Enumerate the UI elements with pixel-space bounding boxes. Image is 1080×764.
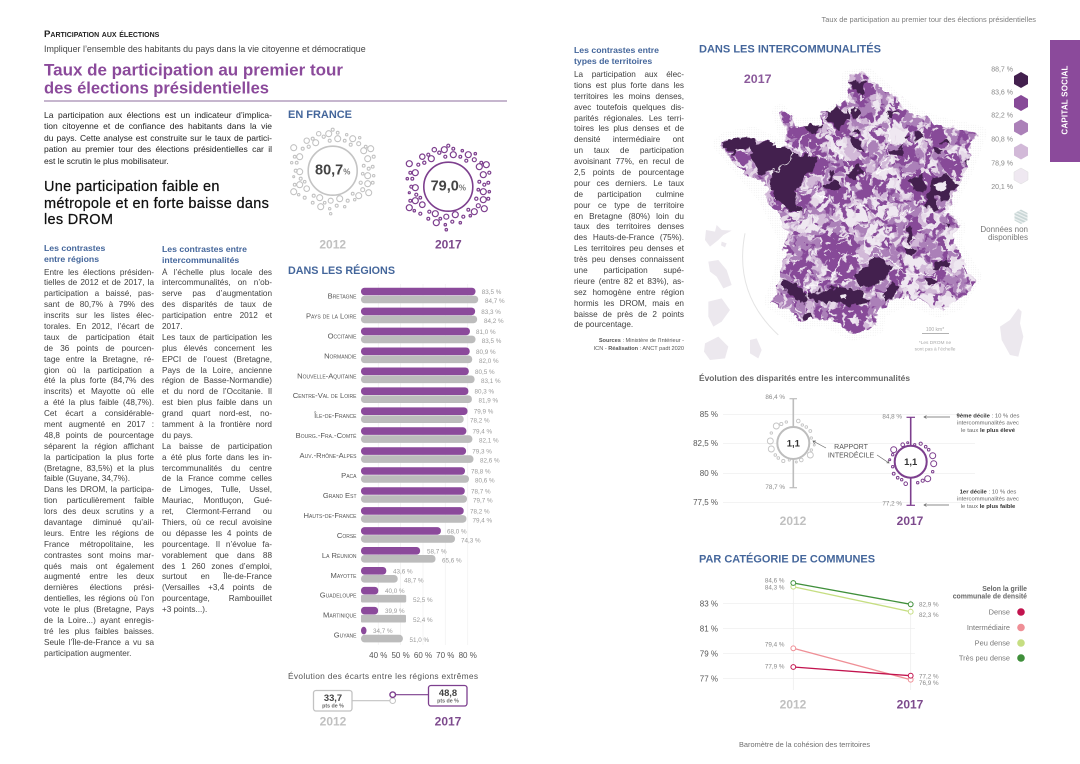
text column: regions: de la Loire...) ayant enregis- xyxy=(44,616,154,625)
text column: territory types: territoires les moins denses, xyxy=(574,92,684,101)
map legend: 83,6 % xyxy=(991,90,1013,96)
running header: Taux de participation au premier tour des élections présidentielles xyxy=(822,15,1036,24)
bar values: 81,0 % xyxy=(476,329,496,336)
text column: intercommunalities: (Versailles +3,4 points de xyxy=(162,583,272,592)
bar axis: 80 % xyxy=(459,651,477,660)
text column: regions: participation a baissé, pas- xyxy=(44,289,154,298)
bar values: 81,9 % xyxy=(478,398,499,405)
text column: regions: tré les plus faibles baisses. xyxy=(44,627,154,636)
subheading: intercommunalities xyxy=(162,244,247,264)
text column: intercommunalities: vorablement que dans 88 xyxy=(162,551,272,560)
text column: intercommunalities: +3 points...). xyxy=(162,605,207,614)
text column: intercommunalities: intercommunalités, on n’ob- xyxy=(162,278,272,287)
text column: territory types: sez homogène entre région xyxy=(574,288,684,297)
text column: territory types: 2,5 points de pourcentage xyxy=(574,168,684,177)
text column: regions: été la plus forte (84,7% des xyxy=(44,376,154,385)
year labels: gap chart xyxy=(320,714,462,728)
subheading: regions: Les contrastes xyxy=(44,243,105,253)
map legend: 20,1 % xyxy=(991,184,1013,191)
subheading: intercommunalities: Les contrastes entre xyxy=(162,244,247,254)
disparities chart: 85 % xyxy=(700,410,718,419)
region labels: Guyane xyxy=(334,631,357,640)
bar values: 79,7 % xyxy=(473,498,493,504)
line chart: communes: 84,3 % xyxy=(765,584,785,592)
region labels: Grand Est xyxy=(323,491,356,500)
region labels: Nouvelle-Aquitaine xyxy=(297,371,357,380)
rosette: 2012: 80,7% xyxy=(315,162,350,178)
decile notes: 1er décile : 10 % des xyxy=(960,490,1016,496)
ratio label: INTERDÉCILE xyxy=(828,450,874,460)
year labels: disparities xyxy=(780,514,924,528)
text column: regions: participation augmenter. xyxy=(44,649,131,658)
sources: ICN - Réalisation : ANCT padt 2020 xyxy=(594,346,684,352)
line chart: communes: 76,9 % xyxy=(919,680,939,687)
text column: territory types: une participation supé- xyxy=(574,266,684,275)
text column: intercommunalities: est bien plus faible dans un xyxy=(162,398,272,407)
text column: regions: vote le plus (Bretagne, Pays xyxy=(44,605,154,614)
region labels: Hauts-de-France xyxy=(304,511,357,520)
dotted halo xyxy=(721,76,979,333)
text column: regions: Entre les élections présiden- xyxy=(44,268,154,276)
text column: regions: gion où la participation a xyxy=(44,366,154,375)
bar axis: 70 % xyxy=(436,651,454,660)
bar axis xyxy=(369,651,477,660)
side tab: capital social: CAPITAL SOCIAL xyxy=(1060,65,1070,135)
text column: territory types: Les territoires peu denses et xyxy=(574,244,684,253)
text column: regions: a été la plus faible (48,7%). xyxy=(44,398,154,407)
map legend: Données non xyxy=(980,225,1028,234)
region labels: Occitanie xyxy=(328,331,357,340)
text column: territory types: des Hauts-de-France (75%). xyxy=(574,233,684,242)
text column: intercommunalities: surtout en Île-de-France xyxy=(162,572,272,581)
year labels: communes: 2017 xyxy=(897,698,924,712)
text column: territory types xyxy=(574,70,684,329)
year labels: communes: 2012 xyxy=(780,698,807,712)
map legend: 88,7 % xyxy=(991,66,1013,74)
region labels: Île-de-France xyxy=(313,411,357,420)
bar values: 82,0 % xyxy=(479,358,499,365)
bar values: 78,8 % xyxy=(471,468,491,476)
region labels: Corse xyxy=(337,531,357,540)
region labels: Normandie xyxy=(324,351,357,360)
text column: territory types: très peu denses connaissent xyxy=(574,255,684,264)
disparities chart: 77,5 % xyxy=(693,498,718,507)
map legend: 82,2 % xyxy=(991,112,1013,120)
text column: territory types: taux des territoires denses xyxy=(574,222,684,231)
heading: intercommunalités: DANS LES INTERCOMMUNALITÉS xyxy=(699,42,881,56)
gap chart: 48,8 xyxy=(439,687,457,698)
text column: regions: Cet écart a considérable- xyxy=(44,409,154,418)
line chart: communes: 79 % xyxy=(700,650,718,658)
text column: regions: tion particulièrement faible xyxy=(44,496,154,505)
bar values: 78,7 % xyxy=(471,488,491,496)
text column: regions: qués mais ont également xyxy=(44,562,154,571)
bar values: 74,3 % xyxy=(461,537,481,544)
region labels: Martinique xyxy=(323,611,357,620)
map scale note xyxy=(915,327,956,352)
text column: territory types: parités régionales. Les terri- xyxy=(574,114,684,123)
text column: intercommunalities: et du nord de l’Occitanie. Il xyxy=(162,387,272,396)
text column: regions: tage entre la Bretagne, ré- xyxy=(44,355,154,364)
bar values: 65,6 % xyxy=(442,557,462,564)
bar values: 82,1 % xyxy=(479,438,499,445)
subtitle: Impliquer l’ensemble des habitants du pays dans la vie citoyenne et démocratique xyxy=(44,44,366,54)
bar values: 34,7 % xyxy=(373,628,393,635)
bar values: 78,2 % xyxy=(470,508,490,515)
whisker 2017 xyxy=(882,414,937,508)
rosette: 2017: 79,0% xyxy=(431,178,466,194)
region labels: Pays de la Loire xyxy=(306,311,357,320)
whisker 2012 xyxy=(765,394,815,491)
decile notes: le taux le plus élevé xyxy=(961,428,1016,434)
overseas and Corsica silhouettes xyxy=(704,225,1023,360)
bar values xyxy=(373,289,505,644)
year labels: gap chart: 2012 xyxy=(320,714,347,728)
text column: regions: leurs. Entre les régions de xyxy=(44,529,154,538)
whisker 2012: 1,1 xyxy=(787,438,801,450)
text column: regions: France métropolitaine, les xyxy=(44,540,154,549)
arrows xyxy=(813,416,950,506)
bar axis: 50 % xyxy=(391,651,410,660)
bar values: 80,9 % xyxy=(476,349,496,356)
subheading: territory types xyxy=(574,45,659,66)
text column: regions: dentielles, les régions où l’on xyxy=(44,594,154,603)
text column: regions: davantage diminué qu’ail- xyxy=(44,518,154,527)
map legend: disponibles xyxy=(988,233,1028,242)
communes legend: Dense xyxy=(989,608,1010,616)
intro paragraph: est le scrutin le plus mobilisateur. xyxy=(44,156,169,166)
text column: regions: 48,8 points de pourcentage xyxy=(44,431,154,440)
year labels: en France: 2012 xyxy=(319,238,346,252)
text column: intercommunalities: La baisse de participation xyxy=(162,442,272,451)
intro paragraph: du pays. Cette analyse est construite sur le taux de partici- xyxy=(44,133,272,143)
bar values: 80,3 % xyxy=(474,389,495,396)
text column: intercommunalities xyxy=(162,268,272,614)
line chart: communes: 82,9 % xyxy=(919,602,939,608)
intro paragraph: La participation aux élections est un indicateur d’implica- xyxy=(44,110,272,120)
communes legend: Selon la grille xyxy=(982,586,1027,593)
ratio label: RAPPORT xyxy=(834,444,869,451)
gap chart xyxy=(314,686,467,711)
region labels: Bourg.-Fra.-Comté xyxy=(296,431,357,440)
bar chart: regions xyxy=(293,284,505,660)
bar values: 79,4 % xyxy=(472,517,493,524)
region labels: Auv.-Rhône-Alpes xyxy=(300,451,357,460)
year labels: en France xyxy=(319,238,462,252)
map scale note: sont pas à l’échelle xyxy=(915,346,956,352)
text column: territory types: pour ces derniers. Le taux xyxy=(574,179,684,188)
line chart: communes xyxy=(700,578,939,690)
text column: intercommunalities: tercommunalités du centre xyxy=(162,464,272,473)
region labels: Paca xyxy=(341,471,357,480)
heading: communes: PAR CATÉGORIE DE COMMUNES xyxy=(699,552,875,566)
map legend xyxy=(980,66,1028,242)
region labels xyxy=(293,292,357,640)
gap chart: 33,7 xyxy=(324,692,342,703)
text column: intercommunalities: grand quart nord-est, no- xyxy=(162,409,272,418)
region labels: Mayotte xyxy=(331,571,357,580)
side tab: capital social xyxy=(1050,40,1080,162)
year labels: communes xyxy=(780,698,924,712)
text column: territory types: de pourcentage. xyxy=(574,320,633,329)
whisker 2012: 78,7 % xyxy=(765,484,785,491)
subheading: intercommunalities: intercommunalités xyxy=(162,254,239,264)
main title xyxy=(44,62,344,98)
text column: intercommunalities: ret, Clermont-Ferrand ou xyxy=(162,507,272,516)
bar values: 79,3 % xyxy=(472,449,492,456)
bar values: 78,2 % xyxy=(470,418,490,425)
text column: regions: (Bretagne, 83,5%) et la plus xyxy=(44,464,154,473)
text column: regions: ment augmenté en 2017 : xyxy=(44,420,154,429)
section heading: métropole et en forte baisse dans xyxy=(44,196,269,212)
text column: intercommunalities: a été plus forte dans les in- xyxy=(162,453,272,462)
disparities chart xyxy=(693,394,1019,510)
text column: regions: tielles de 2012 et de 2017, la xyxy=(44,278,154,287)
bar values: 83,3 % xyxy=(481,309,501,316)
line chart: communes: 84,6 % xyxy=(765,578,785,584)
bar values: 83,5 % xyxy=(482,289,502,296)
bar values: 52,4 % xyxy=(413,617,433,624)
text column: territory types: en Bretagne (80%) loin du xyxy=(574,212,684,221)
text column: regions: Seule l’Île-de-France a vu sa xyxy=(44,638,154,647)
year labels: en France: 2017 xyxy=(435,238,462,252)
communes legend: Peu dense xyxy=(975,638,1010,648)
text column: regions: contrastes sont moins mar- xyxy=(44,551,154,560)
communes legend: communale de densité xyxy=(953,594,1027,600)
text column: intercommunalities: pourcentage. Il n’évolue fa- xyxy=(162,540,272,549)
text column: territory types: tions est plus forte dans les xyxy=(574,81,684,90)
disparities chart: 80 % xyxy=(700,469,718,478)
text column: intercommunalities: 2017. xyxy=(162,322,182,331)
text column: regions: inscrits sur les listes élec- xyxy=(44,311,154,320)
line chart: communes: 79,4 % xyxy=(765,642,785,648)
text column: intercommunalities: Les taux de participation les xyxy=(162,333,272,342)
text column: intercommunalities: tamment à la frontière nord xyxy=(162,420,272,429)
text column: intercommunalities: serve pas d’augmentation xyxy=(162,289,272,298)
intro paragraph: tion citoyenne et de confiance des habitants dans la vie xyxy=(44,121,272,131)
communes legend xyxy=(953,586,1027,662)
gap chart: pts de % xyxy=(437,698,459,704)
bar values: 79,9 % xyxy=(474,409,494,416)
bar values: 79,4 % xyxy=(472,429,493,436)
text column: intercommunalities: plus élevés concernent les xyxy=(162,344,272,353)
caption: extreme regions gap: Évolution des écarts entre les régions extrêmes xyxy=(288,671,478,681)
map scale note: *Les DROM ne xyxy=(919,340,951,346)
text column: intercommunalities: ou dépasse les 4 points de xyxy=(162,529,272,538)
map scale note: 100 km* xyxy=(926,327,944,333)
text column: regions: la participation la plus forte xyxy=(44,453,154,462)
line chart: communes: 77 % xyxy=(700,674,718,684)
bar values: 82,6 % xyxy=(480,458,500,465)
text column: intercommunalities: de la France comme celles xyxy=(162,474,272,483)
text column: territory types: avoisinant 77%, en recul de xyxy=(574,157,684,166)
whisker 2017: 77,2 % xyxy=(882,500,902,508)
communes legend: Intermédiaire xyxy=(967,623,1010,632)
text column: regions xyxy=(44,268,154,658)
section heading: Une participation faible en xyxy=(44,179,220,195)
bar values: 80,6 % xyxy=(475,478,495,484)
text column: intercommunalities: de Limoges, Tulle, Ussel, xyxy=(162,485,272,494)
text column: territory types: hormis les DROM, mais en xyxy=(574,299,684,308)
subheading: regions: entre régions xyxy=(44,254,99,264)
region labels: Centre-Val de Loire xyxy=(293,391,357,400)
map legend: 80,8 % xyxy=(991,136,1013,144)
main title: Taux de participation au premier tour xyxy=(44,62,344,80)
caption: disparities: Évolution des disparités entre les intercommunalités xyxy=(699,372,910,383)
text column: territory types: rieure (entre 82 et 83%), as- xyxy=(574,277,684,286)
rosette: 2012 xyxy=(290,128,375,215)
heading: en France: EN FRANCE xyxy=(288,109,352,121)
text column: intercommunalities: des disparités de taux de xyxy=(162,300,272,309)
bar values: 84,7 % xyxy=(485,298,505,305)
region labels: La Réunion xyxy=(322,551,357,560)
text column: regions: lors des deux scrutins y a xyxy=(44,507,154,516)
text column: territory types: La participation aux élec- xyxy=(574,70,684,79)
bar values: 84,2 % xyxy=(484,318,504,325)
line chart: communes: 81 % xyxy=(700,624,718,634)
subheading: territory types: types de territoires xyxy=(574,56,652,66)
text column: intercommunalities: pourcentage, Rambouillet xyxy=(162,594,272,603)
sources: Sources : Ministère de l’Intérieur - xyxy=(599,338,684,344)
bar values: 83,5 % xyxy=(482,338,502,345)
text column: regions: inscrits) et Mayotte où elle xyxy=(44,387,154,396)
bar axis: 60 % xyxy=(414,651,432,660)
intro paragraph: pation au premier tour des élections présidentielles car il xyxy=(44,144,272,154)
text column: territory types: toires les plus denses et de xyxy=(574,124,684,133)
section heading: les DROM xyxy=(44,212,113,228)
text column: intercommunalities: Thiers, où ce recul avoisine xyxy=(162,518,272,527)
sources xyxy=(594,338,684,352)
bar values: 51,0 % xyxy=(410,637,430,644)
region labels: Bretagne xyxy=(328,292,357,300)
text column: intercommunalities: région de Basse-Normandie) xyxy=(162,376,272,385)
heading: dans les régions: DANS LES RÉGIONS xyxy=(288,264,395,277)
decile notes: 9ème décile : 10 % des xyxy=(957,414,1019,420)
bar values: 80,5 % xyxy=(475,369,495,376)
map legend: 78,9 % xyxy=(991,160,1013,168)
text column: territory types: baisse de près de 2 points xyxy=(574,310,684,319)
text column: intercommunalities: Mauriac, Montluçon, Gué- xyxy=(162,496,272,505)
communes legend: Très peu dense xyxy=(959,654,1010,662)
text column: intercommunalities: participation entre 2012 et xyxy=(162,311,272,320)
year labels: disparities: 2012 xyxy=(780,514,807,528)
gap chart: pts de % xyxy=(322,704,344,710)
line chart: communes: 77,2 % xyxy=(919,674,939,680)
bar axis: 40 % xyxy=(369,651,387,660)
text column: regions: dernières élections prési- xyxy=(44,583,154,592)
text column: intercommunalities: du pays. xyxy=(162,431,193,440)
text column: territory types: un taux de participation xyxy=(574,146,684,155)
text column: intercommunalities: EPCI de l’ouest (Bretagne, xyxy=(162,355,272,364)
text column: regions: Dans les DROM, la participa- xyxy=(44,485,154,494)
text column: regions: torales. En 2012, l’écart de xyxy=(44,322,154,331)
year labels: gap chart: 2017 xyxy=(435,714,462,728)
region labels: Guadeloupe xyxy=(320,591,357,600)
ratio label xyxy=(828,444,874,460)
text column: territory types: pour ce type de territoire xyxy=(574,201,684,210)
text column: territory types: de participation culmine xyxy=(574,190,684,199)
decile notes: le taux le plus faible xyxy=(961,504,1016,510)
footer: Baromètre de la cohésion des territoires xyxy=(739,740,870,749)
bar values: 48,7 % xyxy=(404,577,424,584)
text column: intercommunalities: À l’échelle plus locale des xyxy=(162,268,272,276)
section kicker: Participation aux élections xyxy=(44,29,159,40)
text column: regions: séparent la région affichant xyxy=(44,442,154,451)
subheading: territory types: Les contrastes entre xyxy=(574,45,659,55)
line chart: communes: 83 % xyxy=(700,600,718,608)
decile notes xyxy=(957,414,1019,510)
bar values: 39,9 % xyxy=(385,608,405,615)
whisker 2012: 86,4 % xyxy=(765,394,785,401)
map year: 2017 xyxy=(744,72,772,86)
text column: regions: augmenté entre les deux xyxy=(44,572,154,581)
decile notes: intercommunalités avec xyxy=(957,496,1019,502)
line chart: communes: 82,3 % xyxy=(919,612,939,619)
bar values: 58,7 % xyxy=(427,548,447,555)
map: France intercommunalities xyxy=(704,63,1023,360)
bar values: 52,5 % xyxy=(413,597,433,604)
text column: intercommunalities: des 1 260 zones d’emploi, xyxy=(162,562,272,571)
year labels: disparities: 2017 xyxy=(897,514,924,528)
text column: territory types: avec toutefois quelques dis- xyxy=(574,103,684,112)
decile notes: intercommunalités avec xyxy=(957,420,1019,426)
text column: intercommunalities: Pays de la Loire, ancienne xyxy=(162,366,272,375)
text column: regions: sant de 80,7% à 79% des xyxy=(44,300,154,309)
bar values: 83,1 % xyxy=(481,378,501,385)
rosette: 2017 xyxy=(406,144,491,231)
disparities chart: 82,5 % xyxy=(693,439,718,448)
intro paragraph xyxy=(44,110,272,166)
text column: territory types: densité intermédiaire ont xyxy=(574,135,684,144)
text column: regions: taux de participation était xyxy=(44,333,154,342)
region borders xyxy=(772,107,935,297)
section heading xyxy=(44,179,269,228)
bar values: 68,0 % xyxy=(447,528,467,535)
line chart: communes: 77,9 % xyxy=(765,664,785,670)
subheading: regions xyxy=(44,243,105,264)
main title: des élections présidentielles xyxy=(44,80,269,98)
whisker 2017: 84,8 % xyxy=(882,414,902,420)
text column: regions: faible (Guyane, 34,7%). xyxy=(44,474,130,483)
text column: regions: de 36 points de pourcen- xyxy=(44,344,154,353)
bar values: 43,6 % xyxy=(393,568,413,575)
bar values: 40,0 % xyxy=(385,588,405,595)
whisker 2017: 1,1 xyxy=(904,457,918,468)
